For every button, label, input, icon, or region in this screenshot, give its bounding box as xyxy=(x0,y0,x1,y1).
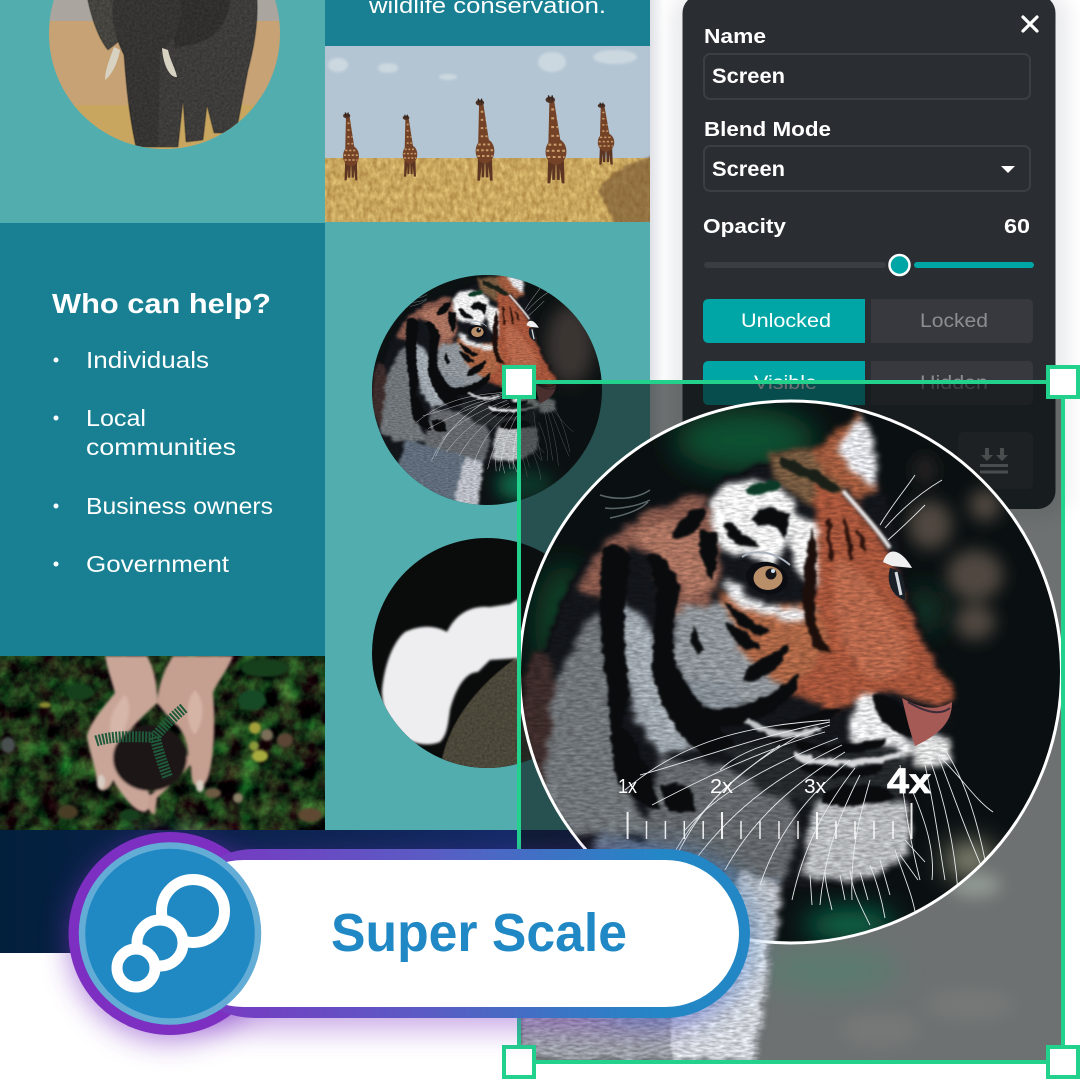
list: who can help: Business owners xyxy=(86,493,273,519)
label: Opacity xyxy=(703,216,1030,238)
toggle: lock state: Unlocked xyxy=(741,311,831,332)
selection overlay xyxy=(519,382,1063,1062)
photo: giraffes xyxy=(325,46,655,225)
close icon xyxy=(1023,17,1037,31)
zoom scale: 1x to 4x: 1x xyxy=(618,776,637,798)
list: who can help: communities xyxy=(86,434,236,460)
list: who can help: Government xyxy=(86,551,230,577)
list: who can help: Individuals xyxy=(86,347,209,373)
photo: bokeh backdrop and neck outside lens xyxy=(519,873,1015,1062)
label: Name: Name xyxy=(704,26,766,48)
selection frame with handles xyxy=(504,367,1078,1077)
photo: tiger circle small xyxy=(372,275,602,505)
label: Opacity: Opacity xyxy=(703,216,787,238)
zoom scale: 1x to 4x: 2x xyxy=(710,776,733,798)
toggle: visibility xyxy=(703,361,1033,405)
dropdown: Blend Mode xyxy=(704,146,1030,191)
heading: Who can help: Who can help? xyxy=(52,288,271,319)
input: Name xyxy=(704,54,1030,99)
panel: poster document xyxy=(0,0,650,953)
photo: magnified tiger lens xyxy=(521,400,1061,944)
badge: Super Scale xyxy=(68,832,750,1035)
label: Opacity: 60 xyxy=(1004,216,1030,238)
photo: white animal circle small xyxy=(372,538,545,768)
zoom scale: 1x to 4x: 3x xyxy=(804,776,826,798)
toggle: visibility: Hidden xyxy=(920,373,988,394)
label: Blend Mode: Blend Mode xyxy=(704,119,831,141)
slider: opacity xyxy=(704,255,1034,275)
zoom scale: 1x to 4x xyxy=(618,762,932,839)
icon: scaling circles xyxy=(117,880,224,987)
input: Name: Screen xyxy=(712,65,785,88)
list: who can help xyxy=(54,347,273,577)
list: who can help: Local xyxy=(86,405,146,431)
toggle: lock state: Locked xyxy=(920,311,988,332)
panel: layer settings xyxy=(670,0,1070,520)
photo: elephant circle xyxy=(49,0,280,149)
badge glow xyxy=(68,838,755,1042)
document shadow xyxy=(650,0,664,830)
toggle: lock state xyxy=(703,299,1033,343)
button: merge down xyxy=(958,432,1033,489)
zoom scale: 1x to 4x: 4x xyxy=(887,762,932,801)
photo: hands holding plant xyxy=(0,656,325,830)
title: Super Scale: Super Scale xyxy=(331,903,627,963)
toggle: visibility: Visible xyxy=(754,373,817,394)
dropdown: Blend Mode: Screen xyxy=(712,158,785,181)
